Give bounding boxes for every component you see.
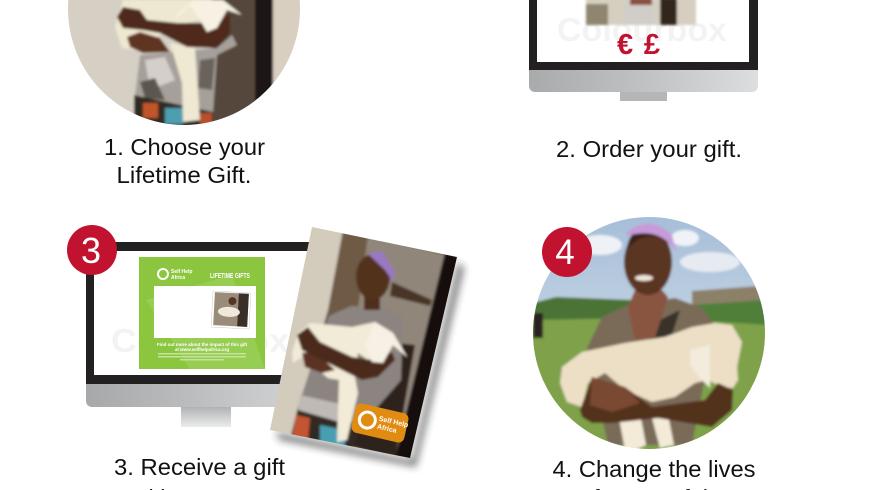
lifetime gifts label: LIFETIME GIFTS xyxy=(210,273,250,280)
step 3 monitor xyxy=(86,242,320,427)
green gift card: Self Help xyxy=(171,269,192,275)
step 2 caption: 2. Order your gift. xyxy=(556,136,742,162)
green gift card xyxy=(139,257,265,369)
self help africa badge: Self Help xyxy=(378,416,409,429)
card shadow xyxy=(275,262,464,467)
green gift card: at www.selfhelpafrica.org xyxy=(175,347,229,352)
step 1 caption xyxy=(104,134,265,188)
logo xyxy=(158,269,168,279)
monitor chin xyxy=(529,70,758,92)
step 3 number badge xyxy=(67,225,117,275)
self help africa badge: Africa xyxy=(376,424,397,435)
step 3 caption xyxy=(108,454,285,490)
infographic: four steps xyxy=(67,0,765,490)
monitor bezel xyxy=(86,242,320,384)
step 1 caption: 1. Choose your xyxy=(104,134,265,160)
self help africa badge xyxy=(352,404,408,442)
monitor stand xyxy=(620,92,667,101)
currency symbols: € £ xyxy=(617,29,660,61)
step 3 number badge: 3 xyxy=(81,230,101,271)
monitor screen and bezel xyxy=(529,0,758,70)
step 1 photo: woman holding goat xyxy=(68,0,300,125)
watermark: Colourbox xyxy=(557,11,728,48)
monitor chin xyxy=(86,384,320,407)
step 1 caption: Lifetime Gift. xyxy=(116,162,252,188)
step 4 number badge: 4 xyxy=(555,233,575,272)
step 2 monitor xyxy=(529,0,758,101)
small photo xyxy=(211,291,251,329)
monitor stand xyxy=(181,407,231,427)
step 3 caption: 3. Receive a gift xyxy=(114,454,285,480)
watermark: Colourbox xyxy=(111,322,290,359)
green gift card: Africa xyxy=(171,275,185,281)
step 4 number badge xyxy=(542,227,592,277)
gift photo on screen xyxy=(586,0,696,25)
green card text: Find out more about the impact of this gift xyxy=(157,342,248,347)
step 3 printed card xyxy=(260,220,470,467)
step 4 caption: 4. Change the lives xyxy=(552,456,756,482)
step 4 photo: woman holding goat in field xyxy=(530,215,770,455)
